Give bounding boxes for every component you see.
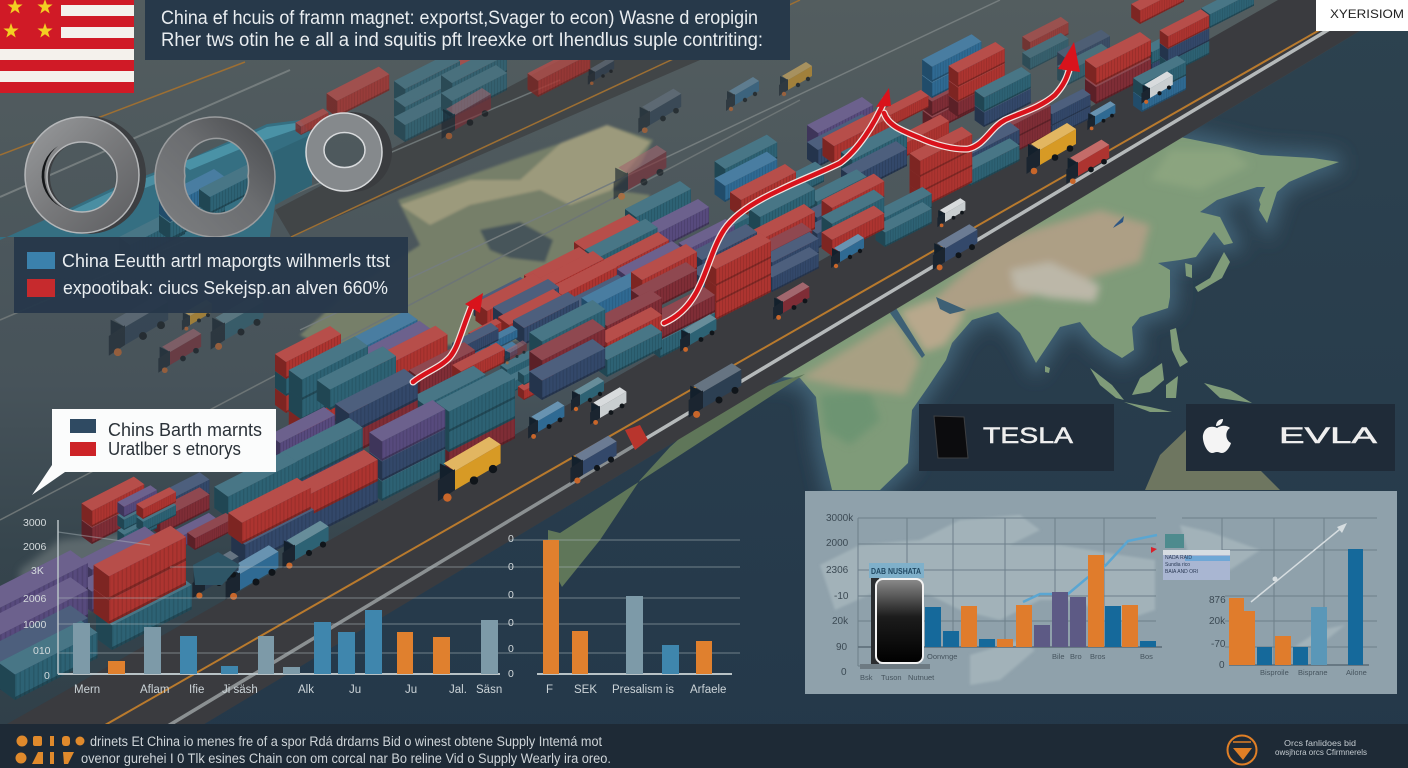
axis labels (826, 513, 1226, 678)
bar chart: left: Jal. (449, 684, 467, 696)
icon: magnet rings (25, 112, 392, 237)
category labels: Bros (1090, 652, 1106, 661)
bar chart: middle: 0 (508, 617, 514, 629)
bar chart: left: Mern (74, 684, 100, 696)
callout: white legend: Uratlber s etnorys (108, 439, 241, 459)
containers: cluster B (269, 311, 515, 537)
axis labels: -10 (834, 591, 849, 602)
inset info card (1151, 534, 1230, 580)
category labels: Ailone (1346, 668, 1367, 677)
axis labels: 2000 (826, 538, 849, 549)
bar chart: left: Ifie (189, 684, 204, 696)
containers: upper-left faded stacks (119, 46, 590, 262)
containers: band behind magnet rings (0, 120, 312, 240)
bar chart: left: 1000 (23, 619, 47, 631)
bar chart: middle: 0 (508, 561, 514, 573)
legend panel: exports: China Eeutth artrl maporgts wilhmerls ttst (62, 250, 390, 271)
bar chart: middle: Arfaele (690, 684, 726, 696)
tag: top-right label: XYERISIOM (1330, 7, 1404, 21)
bar chart: middle: SEK (574, 684, 597, 696)
axis labels: 3000k (826, 513, 854, 524)
bar chart: middle: F (546, 684, 553, 696)
axis labels: 876 (1209, 595, 1226, 606)
map: Eurasia and Africa (780, 137, 1339, 490)
bar chart: left: Alk (298, 684, 314, 696)
callout: white legend (32, 409, 276, 495)
containers: cluster C (468, 164, 819, 400)
category labels: Bos (1140, 652, 1153, 661)
bar chart: left: Aflam (140, 684, 169, 696)
map: South America strip (548, 374, 805, 587)
category labels: Bro (1070, 652, 1082, 661)
containers: cluster A, lower left (0, 452, 314, 700)
flag (0, 0, 134, 93)
bar chart: left: Säsn (476, 684, 502, 696)
bar chart: left: 3000 (23, 517, 47, 529)
category labels: Bsk (860, 673, 873, 682)
vehicles on the road and yard (109, 58, 1173, 600)
bar chart: left: Ji säsh (222, 684, 258, 696)
bar chart: middle: 0 (508, 589, 514, 601)
legend panel: exports: expootibak: ciucs Sekejsp.an alven 660% (63, 277, 388, 298)
bar chart: left (23, 517, 740, 696)
bar chart: left: 2006 (23, 541, 47, 553)
inset info card: BAIA AND ORI (1165, 569, 1198, 575)
bars: right chart (1229, 549, 1363, 665)
tag: top-right label (1316, 0, 1408, 31)
road lines upper-left (0, 0, 1000, 520)
brand panel: Apple with EVLA: EVLA (1279, 423, 1378, 448)
axis labels: 90 (836, 642, 848, 653)
header panel (145, 0, 790, 60)
footer bar: owsjhcra orcs Cfirmnerels (1275, 747, 1367, 757)
axis labels: 0 (1219, 660, 1225, 671)
bar chart: left: 2006 (23, 593, 47, 605)
grid (858, 518, 1377, 666)
axis labels: 20k (832, 616, 849, 627)
bar chart: left: Ju (349, 684, 361, 696)
footer bar: Orcs fanlidoes bid (1284, 738, 1356, 748)
bar chart: left: 3K (31, 565, 44, 577)
header panel: Rher tws otin he e all a ind squitis pft lreexke ort Ihendlus suple contriting: (161, 30, 763, 51)
category labels: Bisprane (1298, 668, 1328, 677)
bar chart: left: 010 (33, 645, 51, 657)
brand panel: Tesla with phone: TESLA (983, 423, 1073, 448)
ground: upper yard asphalt (275, 60, 700, 237)
bar chart: left: 0 (44, 670, 50, 682)
containers: top-right cluster (1022, 0, 1254, 112)
category labels: Tuson (881, 673, 902, 682)
brand panel: Tesla with phone (919, 404, 1114, 471)
arrow: white trend (1251, 523, 1347, 602)
bar chart: middle: 0 (508, 533, 514, 545)
bar chart: middle: 0 (508, 668, 514, 680)
containers: cluster D (715, 34, 1090, 256)
axis labels: 20k (1209, 616, 1226, 627)
pale concrete patch near chart (20, 532, 150, 620)
brand panel: Apple with EVLA (1186, 404, 1395, 471)
bar chart: left: Ju (405, 684, 417, 696)
bar chart: middle (508, 533, 732, 696)
category labels: Bisproile (1260, 668, 1289, 677)
footer icons (16, 736, 84, 764)
inset info card: Sundia rico (1165, 562, 1190, 568)
icon: smartphone: DAB NUSHATA (871, 567, 921, 576)
arrow: rising red trend lines (413, 42, 1080, 382)
bars: left chart (925, 555, 1156, 647)
axis labels: 0 (841, 667, 847, 678)
chart panel: right (805, 491, 1397, 694)
category labels: Bile (1052, 652, 1065, 661)
map: upper land mass (300, 125, 653, 350)
axis labels: 2306 (826, 565, 849, 576)
faded map in chart panel (820, 515, 1345, 685)
inset info card: NADA RAID (1165, 555, 1192, 561)
map: coastal glow (780, 137, 1339, 490)
line series (1023, 535, 1157, 602)
bar chart: middle: 0 (508, 643, 514, 655)
footer logo (1228, 736, 1256, 764)
footer bar (0, 724, 1408, 768)
footer bar: drinets Et China io menes fre of a spor Rdá drdarns Bid o winest obtene Supply Intemá mot (90, 734, 602, 749)
legend panel: exports (14, 237, 408, 313)
header panel: China ef hcuis of framn magnet: exportst,Svager to econ) Wasne d eropigin (161, 8, 758, 29)
footer bar: ovenor gurehei I 0 Tlk esines Chain con om corcal nar Bo reline Vid o Supply Wearly ira oreo. (81, 751, 611, 766)
bar chart: middle: Presalism is (612, 684, 674, 696)
callout: white legend: Chins Barth marnts (108, 420, 262, 440)
axis labels: -70 (1211, 639, 1226, 650)
category labels (860, 652, 1367, 682)
category labels: Nutnuet (908, 673, 935, 682)
category labels: Oonvnge (927, 652, 957, 661)
icon: smartphone (860, 563, 930, 669)
